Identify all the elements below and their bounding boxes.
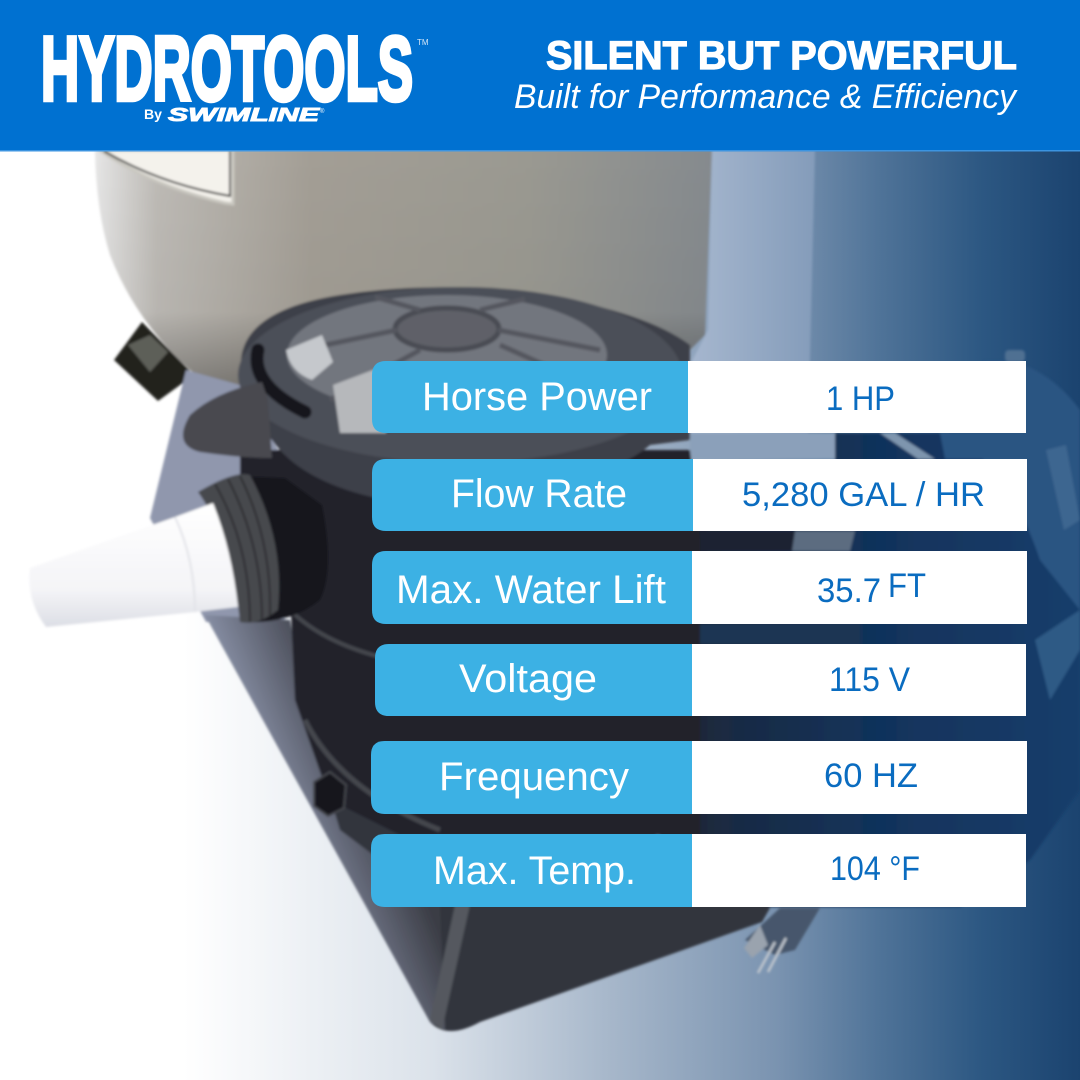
wall panel	[680, 150, 815, 440]
spec row: frequency: 60 HZ	[824, 757, 918, 795]
pump lid	[238, 287, 690, 502]
logo	[41, 19, 429, 125]
spec row: max water lift	[372, 551, 1027, 624]
pump base	[205, 615, 770, 1031]
spec row: max temp	[371, 834, 1026, 907]
pump body	[240, 450, 700, 835]
drain valve	[114, 322, 194, 401]
spec row: max temp: Max. Temp.	[433, 849, 636, 893]
spec row: max water lift: FT	[888, 567, 926, 605]
tank label	[100, 150, 233, 204]
logo: TM	[417, 38, 429, 47]
power plug	[744, 908, 820, 973]
spec row: flow rate	[372, 459, 1027, 531]
product photo illustration	[29, 150, 1080, 1031]
spec row: flow rate: 5,280 GAL / HR	[742, 476, 985, 514]
spec row: max temp: 104 °F	[830, 850, 920, 888]
logo: By	[144, 106, 162, 122]
pump handle	[183, 382, 272, 458]
spec row: horse power: Horse Power	[422, 375, 652, 419]
spec row: frequency: Frequency	[439, 755, 629, 799]
spec row: horse power	[372, 361, 1026, 433]
spec row: max water lift: Max. Water Lift	[396, 568, 666, 612]
logo: ®	[320, 108, 325, 115]
spec row: frequency	[371, 741, 1027, 814]
spec row: voltage	[375, 644, 1026, 716]
header band	[0, 0, 1080, 152]
logo: SWIMLINE	[168, 105, 321, 125]
subheading: Built for Performance & Efficiency	[514, 78, 1018, 116]
threaded fitting	[198, 474, 328, 623]
logo: HYDROTOOLS	[41, 19, 413, 120]
spec row: flow rate: Flow Rate	[451, 472, 627, 516]
spec row: horse power: 1 HP	[826, 380, 895, 418]
spec row: voltage: 115 V	[829, 661, 910, 699]
hose adapter	[29, 503, 238, 627]
spec row: voltage: Voltage	[459, 657, 597, 701]
filter tank	[95, 150, 712, 420]
base left flap	[150, 370, 290, 622]
motor housing	[660, 350, 1080, 907]
spec row: max water lift: 35.7	[817, 572, 881, 610]
heading: SILENT BUT POWERFUL	[546, 34, 1017, 78]
